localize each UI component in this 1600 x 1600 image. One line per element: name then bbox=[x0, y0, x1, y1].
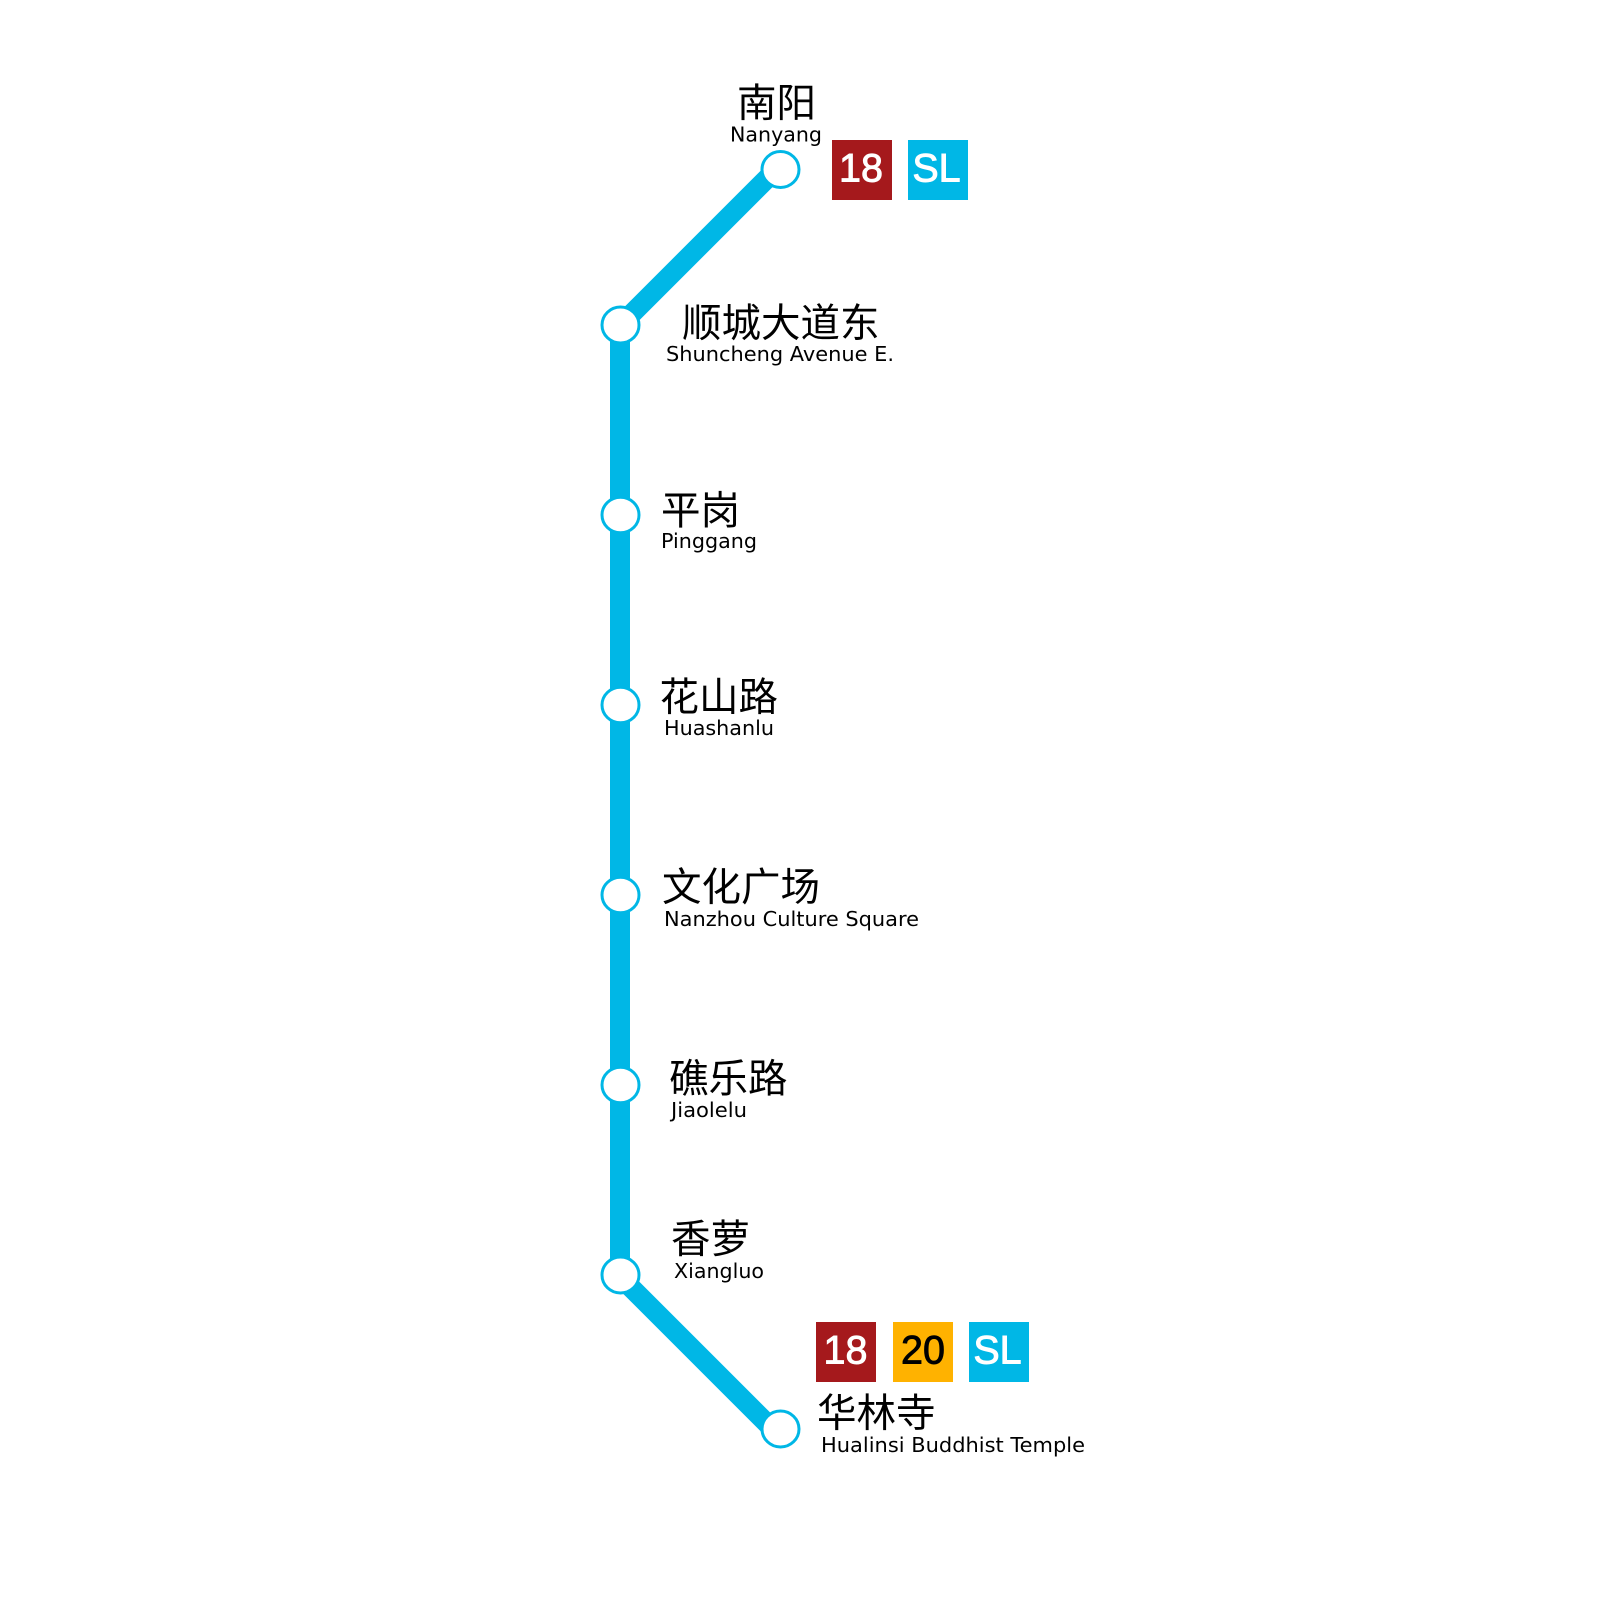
station label: Nanzhou Culture Square: 文化广场 bbox=[662, 866, 820, 910]
station label: Nanyang: Nanyang bbox=[730, 122, 822, 146]
transfer badges: Hualinsi Buddhist Temple: 18 bbox=[824, 1328, 867, 1372]
transfer badges: Hualinsi Buddhist Temple: 20 bbox=[901, 1328, 945, 1372]
station label: Nanzhou Culture Square: Nanzhou Culture Square bbox=[664, 907, 919, 931]
station label: Pinggang bbox=[661, 490, 757, 553]
transfer badges: Nanyang bbox=[832, 140, 968, 200]
station label: Huashanlu bbox=[660, 676, 778, 740]
transfer badges: Nanyang: SL bbox=[912, 146, 961, 190]
transfer badges: Hualinsi Buddhist Temple bbox=[816, 1322, 1029, 1382]
station label: Nanzhou Culture Square bbox=[662, 866, 919, 931]
station label: Pinggang: Pinggang bbox=[661, 529, 757, 553]
station label: Huashanlu: Huashanlu bbox=[664, 716, 774, 740]
station label: Huashanlu: 花山路 bbox=[660, 676, 778, 720]
station label: Jiaolelu: 礁乐路 bbox=[669, 1058, 788, 1102]
route line bbox=[620, 166, 780, 1432]
transfer badges: Hualinsi Buddhist Temple: SL bbox=[973, 1328, 1022, 1372]
station label: Hualinsi Buddhist Temple: Hualinsi Buddhist Temple bbox=[821, 1433, 1085, 1457]
station label: Hualinsi Buddhist Temple: 华林寺 bbox=[817, 1392, 936, 1436]
station label: Jiaolelu: Jiaolelu bbox=[669, 1098, 747, 1122]
station label: Shuncheng Avenue E.: 顺城大道东 bbox=[682, 302, 880, 346]
station label: Xiangluo bbox=[671, 1218, 764, 1283]
station label: Nanyang bbox=[730, 82, 822, 146]
transfer badges: Nanyang: 18 bbox=[839, 146, 883, 190]
station label: Xiangluo: Xiangluo bbox=[674, 1259, 764, 1283]
station label: Xiangluo: 香萝 bbox=[671, 1218, 750, 1262]
station label: Pinggang: 平岗 bbox=[661, 490, 740, 534]
station label: Jiaolelu bbox=[669, 1058, 788, 1122]
station label: Shuncheng Avenue E.: Shuncheng Avenue E. bbox=[666, 342, 894, 366]
stations bbox=[602, 152, 799, 1447]
station label: Nanyang: 南阳 bbox=[737, 82, 816, 126]
station label: Shuncheng Avenue E. bbox=[666, 302, 894, 366]
station label: Hualinsi Buddhist Temple bbox=[817, 1392, 1085, 1457]
